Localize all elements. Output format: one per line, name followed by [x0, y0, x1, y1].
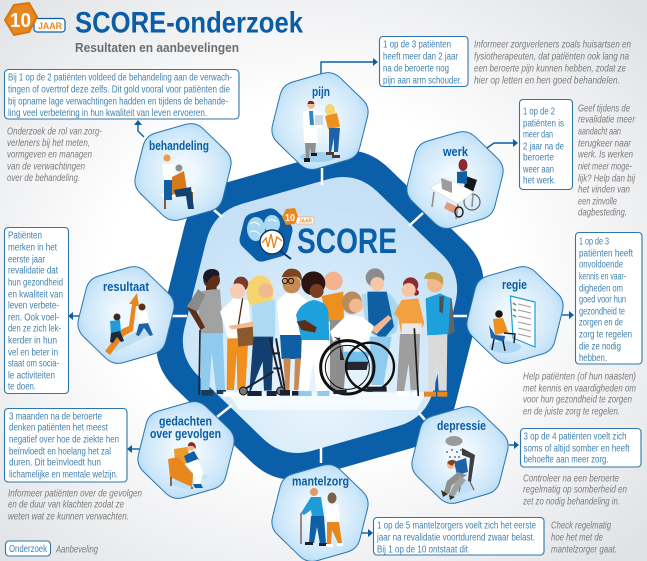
- recommendation: depressie: [522, 474, 627, 508]
- arrow: regie: [562, 311, 574, 319]
- recommendation: mantelzorg: hoe het met de: [551, 532, 603, 544]
- recommendation: werk: werk. Is werken: [578, 150, 633, 160]
- panel: werk: 1 op de 2: [523, 106, 555, 118]
- recommendation: pijn: [474, 40, 631, 86]
- label: mantelzorg: mantelzorg: [292, 474, 349, 488]
- recommendation: pijn: hier op letten en hen goed behandelen.: [474, 76, 620, 86]
- label: behandeling: behandeling: [149, 138, 209, 153]
- recommendation: werk: aandacht aan: [578, 126, 621, 138]
- SCORE logo: SCORE: [297, 222, 397, 261]
- panel: resultaat: merken in het: [8, 242, 57, 254]
- person: grey-haired woman: [362, 268, 399, 390]
- recommendation: werk: Geef tijdens de: [578, 104, 630, 114]
- panel: resultaat: en kwaliteit van: [8, 290, 63, 300]
- arrow: pijn: [321, 58, 378, 74]
- panel: werk: 2 jaar na de: [523, 142, 564, 152]
- panel: resultaat: vel en beter in: [8, 348, 58, 358]
- panel: pijn: heeft meer dan 2 jaar: [383, 52, 459, 62]
- badge: 10 jaar: [5, 3, 65, 35]
- arrow: resultaat: [68, 312, 79, 320]
- panel: behandeling: tingen of overtrof deze zelfs. Dit gold vooral voor patiënten die: [8, 84, 230, 96]
- label: depressie: depressie: [437, 418, 486, 433]
- legend: Aanbeveling: [55, 544, 98, 556]
- label: werk: werk: [442, 144, 469, 159]
- panel: gedachten over gevolgen: negatief over hoe de ziekte hen: [9, 434, 119, 446]
- callout: regie: [576, 232, 642, 364]
- arrow: behandeling: [134, 120, 144, 137]
- person: woman with orange shirt and cane: [394, 277, 424, 396]
- panel: mantelzorg: jaar na revalidatie voortdurend zwaar belast.: [376, 532, 535, 544]
- callout: behandeling: [4, 70, 239, 119]
- panel: regie: onvoldoende: [579, 260, 623, 270]
- panel: resultaat: Patiënten: [8, 230, 42, 242]
- icon: person in armchair: [168, 442, 208, 490]
- panel: gedachten over gevolgen: 3 maanden na de beroerte: [9, 412, 102, 422]
- recommendation: behandeling: van de verwachtingen: [7, 162, 85, 172]
- hexagon: mantelzorg: [272, 465, 368, 561]
- recommendation: gedachten: [8, 488, 142, 522]
- recommendation: regie: [523, 372, 636, 418]
- icon: therapist and patient: [160, 154, 196, 209]
- panel: gedachten over gevolgen: denken patiënten het meest: [9, 422, 108, 434]
- recommendation: werk: terugkeer naar: [578, 138, 632, 150]
- recommendation: behandeling: verleners bij het meten,: [7, 138, 90, 149]
- panel: pijn: [272, 36, 631, 169]
- SCORE logo: [240, 208, 397, 262]
- panel: regie: [467, 232, 642, 418]
- panel: resultaat: eerste jaar: [8, 254, 46, 266]
- panel: mantelzorg: [272, 465, 617, 561]
- panel: resultaat: staat om socia-: [8, 358, 59, 370]
- panel: resultaat: den ze zich lek-: [8, 324, 61, 334]
- panel: regie: goed voor hun: [579, 294, 626, 306]
- panel: mantelzorg: 1 op de 5 mantelzorgers voelt zich het eerste: [377, 520, 536, 532]
- subtitle: Resultaten en aanbevelingen: [75, 40, 239, 55]
- recommendation: mantelzorg: [551, 520, 617, 556]
- recommendation: gedachten: weten wat ze kunnen verwachten.: [8, 512, 129, 522]
- panel: werk: meer dan: [523, 130, 553, 140]
- panel: regie: digheden om: [579, 284, 623, 294]
- panel: regie: zorg te regelen: [579, 330, 632, 340]
- badge: 10 jaar: 10: [10, 10, 31, 32]
- hexagon: behandeling: [135, 124, 231, 220]
- label: resultaat: resultaat: [103, 279, 150, 294]
- panel: behandeling: ling veel verbetering in hun kwaliteit van leven ervoeren.: [8, 108, 207, 119]
- recommendation: depressie: Controleer na een beroerte: [523, 474, 619, 484]
- recommendation: behandeling: vormgeven en managen: [7, 150, 92, 160]
- title: SCORE-onderzoek: [75, 6, 303, 40]
- recommendation: werk: dagbesteding.: [578, 208, 627, 218]
- callout: werk: [520, 100, 572, 190]
- label: gedachten over gevolgen: over gevolgen: [150, 426, 221, 441]
- panel: behandeling: Bij 1 op de 2 patiënten voldeed de behandeling aan de verwach-: [8, 72, 232, 84]
- hexagon: werk: [407, 132, 503, 228]
- panel: behandeling: bij opname lage verwachtingen hadden en tijdens de behande-: [8, 96, 228, 108]
- recommendation: depressie: zet zo nodig behandeling in.: [522, 496, 620, 508]
- icon: person under rain cloud: [441, 436, 475, 500]
- legend: [6, 541, 98, 556]
- panel: werk: het werk.: [523, 176, 556, 186]
- recommendation: mantelzorg: Check regelmatig: [551, 520, 611, 532]
- recommendation: behandeling: over de behandeling.: [7, 173, 80, 184]
- panel: gedachten over gevolgen: duren. Dit beïnvloedt hun: [9, 458, 101, 468]
- panel: werk: [407, 100, 636, 228]
- SCORE logo: 10: [285, 213, 295, 224]
- panel: resultaat: revalidatie dat: [8, 266, 58, 276]
- person: woman with brown bag: [220, 277, 253, 397]
- person: wheelchair user: [321, 291, 394, 394]
- panel: regie: 1 op de 3: [579, 236, 609, 248]
- panel: behandeling: [4, 70, 239, 220]
- panel: regie: zorgen en de: [579, 318, 623, 328]
- arrow: gedachten: [127, 445, 140, 453]
- panel: regie: patiënten heeft: [579, 248, 633, 260]
- label: pijn: pijn: [312, 84, 330, 99]
- panel: resultaat: ren. Ook voel-: [8, 312, 59, 324]
- arrow: mantelzorg: [361, 529, 373, 537]
- hexagon: resultaat: [78, 267, 174, 363]
- panel: regie: hebben.: [579, 353, 607, 364]
- icon: person at desk in wheelchair: [430, 159, 480, 219]
- person: woman with afro: [296, 271, 329, 396]
- recommendation: mantelzorg: mantelzorger gaat.: [551, 544, 617, 556]
- recommendation: regie: en de juiste zorg te regelen.: [523, 406, 620, 418]
- SCORE logo: JAAR: [299, 218, 312, 224]
- recommendation: werk: het vinden van: [578, 184, 630, 196]
- arrow: werk: [487, 139, 518, 148]
- person: man with glasses: [277, 269, 307, 396]
- panel: pijn: na de beroerte nog: [383, 64, 449, 74]
- hexagon: pijn: [272, 73, 368, 169]
- panel: resultaat: leven verbete-: [8, 300, 59, 312]
- panel: resultaat: te doen.: [8, 382, 36, 392]
- floor: [227, 393, 427, 410]
- callout: depressie: [520, 428, 641, 467]
- person: bald man behind: [322, 272, 344, 390]
- panel: werk: weer aan: [522, 164, 554, 176]
- panel: gedachten over gevolgen: [4, 402, 234, 522]
- group of people: [187, 268, 455, 410]
- hexagon: gedachten: [138, 402, 234, 498]
- hexagon: depressie: [412, 407, 508, 503]
- icon: two people lifting arrow: [105, 293, 153, 355]
- panel: gedachten over gevolgen: lichamelijke en mentale welzijn.: [9, 470, 118, 480]
- recommendation: behandeling: Onderzoek de rol van zorg-: [7, 126, 103, 138]
- legend: Onderzoek: [9, 544, 48, 555]
- panel: pijn: pijn aan arm schouder.: [383, 76, 462, 86]
- panel: resultaat: [4, 228, 174, 394]
- panel: werk: patiënten is: [523, 118, 564, 130]
- panel: gedachten over gevolgen: beïnvloedt en hoelang het zal: [9, 446, 111, 458]
- panel: pijn: 1 op de 3 patiënten: [383, 40, 451, 50]
- callout: gedachten: [4, 408, 127, 482]
- icon: person with checklist: [489, 296, 535, 353]
- arrow: depressie: [509, 441, 519, 449]
- panel: mantelzorg: Bij 1 op de 10 ontstaat dit: [377, 544, 468, 556]
- panel: depressie: [412, 407, 641, 508]
- panel: regie: kennis en vaar-: [579, 272, 626, 282]
- panel: werk: beroerte: [523, 152, 554, 164]
- recommendation: gedachten: Informeer patiënten over de gevolgen: [8, 488, 142, 500]
- central hexagon ring: [156, 150, 484, 480]
- callout: mantelzorg: [374, 518, 544, 555]
- person: man with cane: [187, 269, 226, 396]
- panel: resultaat: hun gezondheid: [8, 278, 63, 288]
- recommendation: werk: een zinvolle: [578, 196, 617, 208]
- label: gedachten over gevolgen: gedachten: [159, 414, 212, 428]
- panel: depressie: behoefte aan meer zorg.: [524, 454, 608, 466]
- panel: resultaat: kerder in hun: [8, 336, 57, 346]
- icon: elderly man and carer: [301, 488, 343, 547]
- panel: regie: die ze nodig: [579, 342, 621, 352]
- person: man with backpack: [424, 272, 455, 397]
- panel: regie: gezondheid te: [579, 306, 625, 318]
- label: gedachten over gevolgen: [150, 414, 221, 441]
- callout: pijn: [380, 36, 468, 86]
- callout: resultaat: [4, 228, 68, 394]
- hexagon: regie: [467, 267, 563, 363]
- person: blond woman with walker: [228, 275, 285, 396]
- recommendation: behandeling: [7, 126, 103, 184]
- label: regie: regie: [502, 277, 527, 292]
- panel: resultaat: le activiteiten: [8, 370, 55, 382]
- recommendation: gedachten: en de duur van klachten zodat ze: [8, 500, 124, 510]
- badge: 10 jaar: JAAR: [38, 21, 62, 32]
- icon: doctor and patient: [300, 101, 340, 162]
- recommendation: werk: [578, 104, 636, 218]
